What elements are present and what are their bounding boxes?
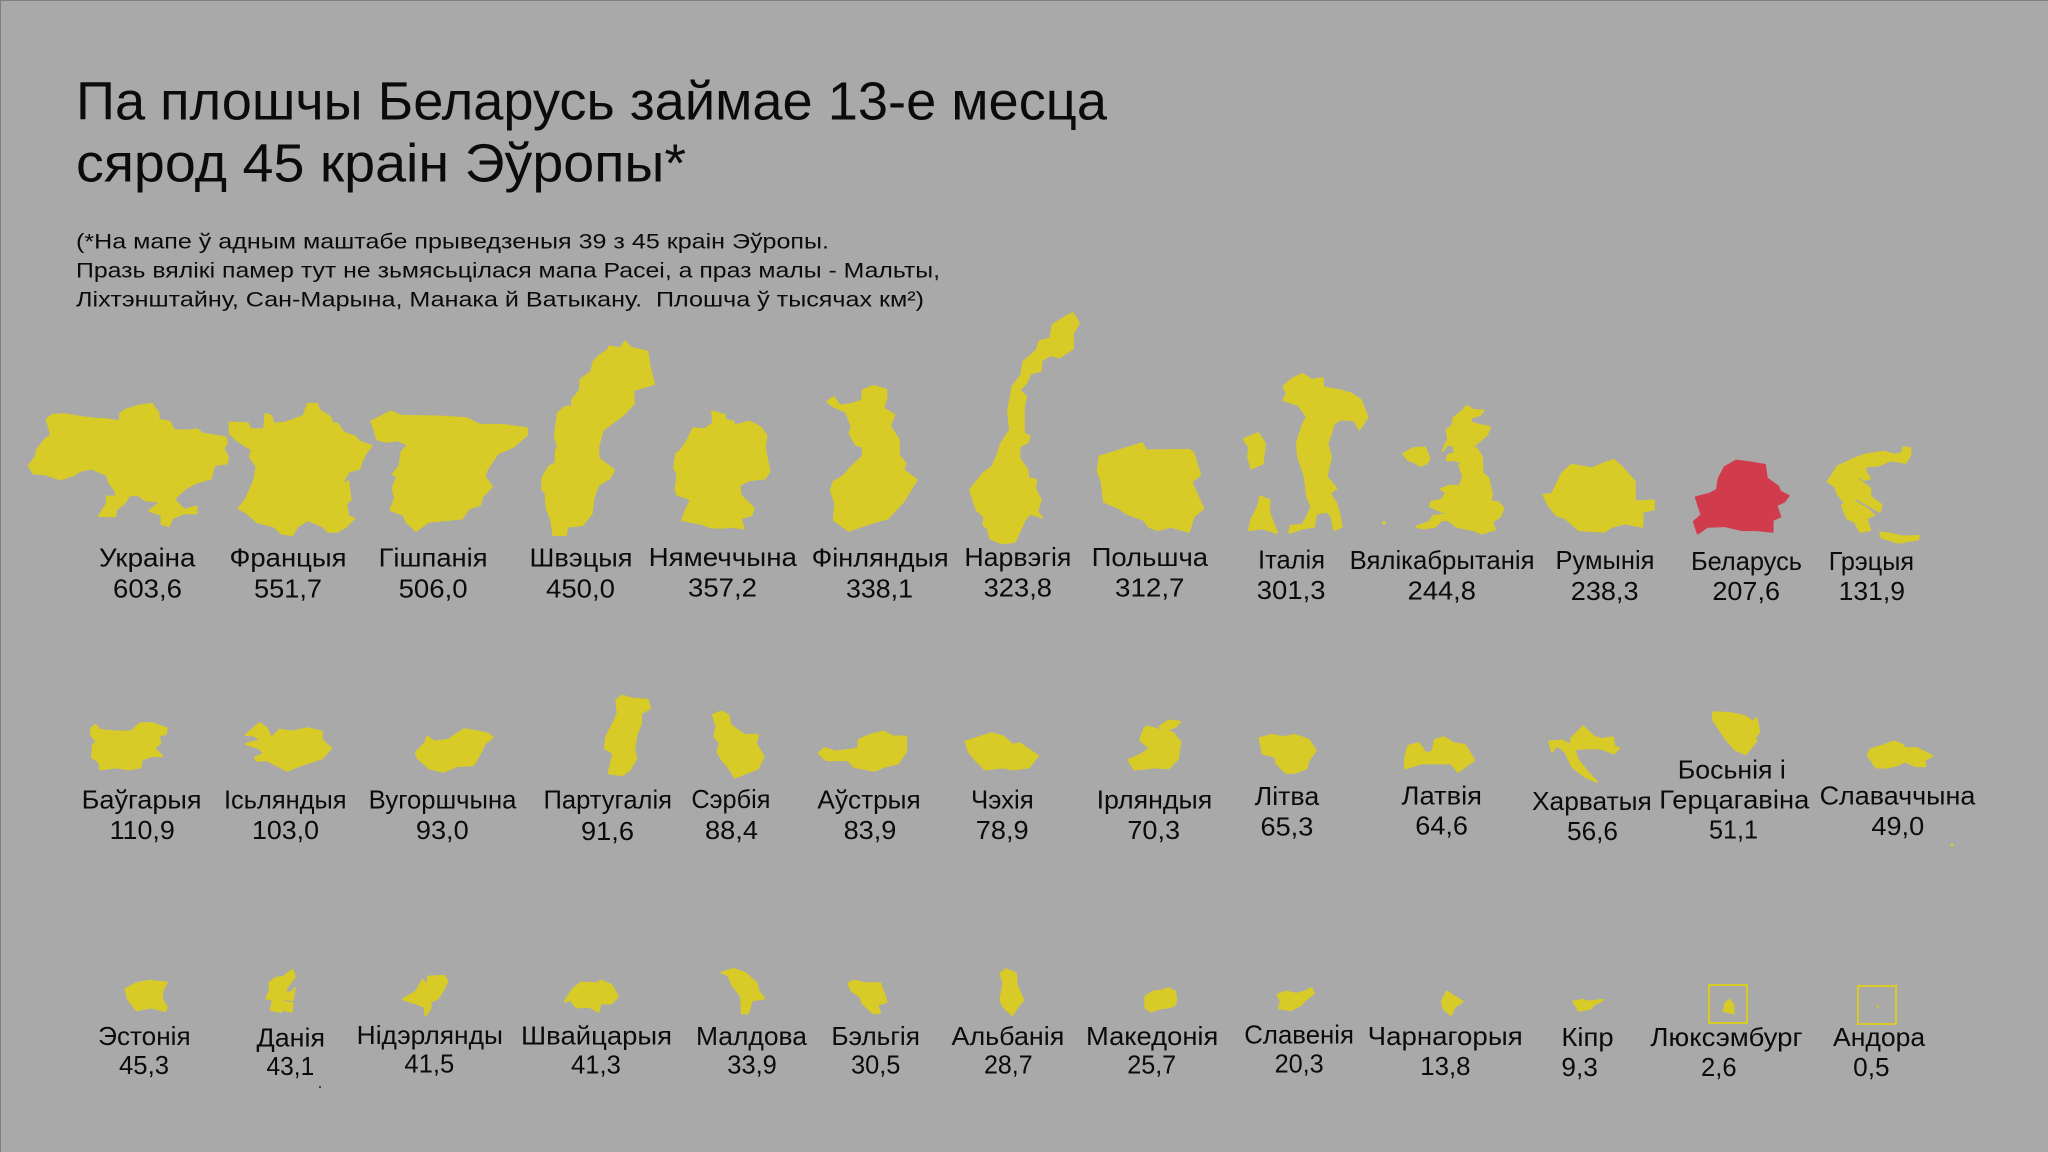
country: Эстонія bbox=[98, 981, 191, 1080]
icon: Andorra inset frame bbox=[1858, 986, 1896, 1024]
country: Славаччына: Славаччына bbox=[1820, 780, 1976, 810]
country: Ірляндыя: 70,3 bbox=[1127, 815, 1180, 845]
country: Грэцыя bbox=[1828, 447, 1919, 606]
country: Румынія: 238,3 bbox=[1571, 576, 1638, 606]
country: Славенія: 20,3 bbox=[1275, 1048, 1324, 1078]
icon: Luxembourg inset frame bbox=[1709, 985, 1747, 1023]
country: Чарнагорыя: 13,8 bbox=[1420, 1051, 1470, 1081]
country: Бэльгія: Бэльгія bbox=[831, 1021, 920, 1051]
country: Нідэрлянды: 41,5 bbox=[404, 1049, 454, 1079]
country: Харватыя: Харватыя bbox=[1532, 786, 1652, 816]
subtitle note: Празь вялікі памер тут не зьмясьцілася мапа Расеі, а праз малы - Мальты, bbox=[76, 259, 940, 283]
country: Сэрбія: Сэрбія bbox=[691, 784, 770, 814]
country: Чэхія: 78,9 bbox=[976, 815, 1029, 845]
country: Італія bbox=[1244, 374, 1367, 605]
country: Гішпанія bbox=[371, 412, 527, 604]
country: Малдова: Малдова bbox=[696, 1021, 808, 1051]
country: Італія: 301,3 bbox=[1257, 575, 1326, 605]
country: Харватыя bbox=[1532, 727, 1652, 846]
country: Вялікабрытанія: 244,8 bbox=[1408, 575, 1476, 605]
country: Кіпр: 9,3 bbox=[1561, 1052, 1598, 1082]
country: Бэльгія bbox=[831, 981, 920, 1079]
country: Славенія: Славенія bbox=[1244, 1019, 1354, 1049]
country: Нарвэгія: Нарвэгія bbox=[964, 542, 1071, 572]
country: Нямеччына: Нямеччына bbox=[649, 542, 798, 572]
country: Швэцыя: 450,0 bbox=[546, 574, 615, 604]
country: Літва bbox=[1255, 735, 1320, 842]
country: Босьнія і Герцагавіна bbox=[1659, 712, 1810, 844]
country: Люксэмбург: 2,6 bbox=[1701, 1052, 1737, 1082]
country: Францыя: Францыя bbox=[230, 543, 346, 573]
country: Ісьляндыя bbox=[224, 723, 346, 845]
country: Сэрбія bbox=[691, 712, 770, 845]
country: Харватыя: 56,6 bbox=[1567, 816, 1618, 846]
country: Ірляндыя bbox=[1097, 721, 1212, 845]
country: Аўстрыя bbox=[817, 732, 921, 845]
country: Фінляндыя: Фінляндыя bbox=[812, 543, 949, 573]
country: Вугоршчына bbox=[369, 729, 517, 845]
country: Ісьляндыя: 103,0 bbox=[252, 815, 319, 845]
country: Люксэмбург: Люксэмбург bbox=[1650, 1022, 1803, 1052]
country: Партугалія: 91,6 bbox=[581, 816, 634, 846]
country: Сэрбія: 88,4 bbox=[705, 815, 758, 845]
country: Кіпр: Кіпр bbox=[1561, 1022, 1614, 1052]
country: Румынія: Румынія bbox=[1556, 545, 1654, 575]
country: Аўстрыя: 83,9 bbox=[844, 815, 896, 845]
country: Малдова bbox=[696, 969, 808, 1079]
country: Літва: 65,3 bbox=[1260, 812, 1313, 842]
country: Францыя bbox=[229, 404, 371, 604]
country: Украіна bbox=[29, 404, 228, 604]
country: Баўгарыя: Баўгарыя bbox=[82, 784, 202, 814]
country: Ісьляндыя: Ісьляндыя bbox=[224, 784, 346, 814]
country: Эстонія: Эстонія bbox=[98, 1021, 191, 1051]
country: Партугалія bbox=[544, 696, 672, 846]
country: Францыя: 551,7 bbox=[254, 574, 322, 604]
country: Баўгарыя bbox=[82, 723, 202, 845]
country: Швайцарыя: Швайцарыя bbox=[521, 1020, 672, 1050]
country: Баўгарыя: 110,9 bbox=[110, 815, 175, 845]
country: Андора: Андора bbox=[1833, 1022, 1926, 1052]
country: Літва: Літва bbox=[1255, 781, 1320, 811]
country: Партугалія: Партугалія bbox=[544, 784, 672, 814]
country: Нарвэгія: 323,8 bbox=[984, 573, 1052, 603]
country: Чэхія: Чэхія bbox=[971, 784, 1034, 814]
country: Ірляндыя: Ірляндыя bbox=[1097, 784, 1212, 814]
country: Македонія: 25,7 bbox=[1127, 1049, 1176, 1079]
country: Фінляндыя: 338,1 bbox=[846, 574, 913, 604]
country: Альбанія: Альбанія bbox=[952, 1021, 1064, 1051]
country: Данія: 43,1 bbox=[266, 1051, 314, 1081]
country: Андора bbox=[1833, 986, 1926, 1082]
country: Нямеччына bbox=[649, 412, 798, 603]
country: Нідэрлянды: Нідэрлянды bbox=[357, 1020, 503, 1050]
country: Фінляндыя bbox=[812, 386, 949, 604]
country: Вугоршчына: 93,0 bbox=[416, 815, 469, 845]
country: Данія bbox=[256, 970, 325, 1081]
country: Нарвэгія bbox=[964, 313, 1079, 603]
country: Малдова: 33,9 bbox=[727, 1049, 777, 1079]
country: Люксэмбург bbox=[1650, 985, 1803, 1082]
country: Польшча: 312,7 bbox=[1115, 573, 1184, 603]
country: Альбанія: 28,7 bbox=[984, 1049, 1033, 1079]
country: Латвія bbox=[1402, 737, 1482, 840]
country: Македонія: Македонія bbox=[1086, 1021, 1218, 1051]
country: Босьнія і Герцагавіна: Босьнія і bbox=[1678, 755, 1786, 785]
country: Славаччына bbox=[1820, 742, 1976, 841]
subtitle note: (*На мапе ў адным маштабе прыведзеныя 39 з 45 краін Эўропы. bbox=[76, 229, 829, 253]
country: Андора: 0,5 bbox=[1853, 1052, 1890, 1082]
country: Румынія bbox=[1544, 460, 1654, 606]
country: Швайцарыя bbox=[521, 981, 672, 1079]
country: Эстонія: 45,3 bbox=[119, 1050, 169, 1080]
country: Вялікабрытанія: Вялікабрытанія bbox=[1350, 545, 1535, 575]
country: Македонія bbox=[1086, 988, 1218, 1079]
title: Па плошчы Беларусь займае 13-е месца bbox=[76, 71, 1108, 131]
country: Украіна: Украіна bbox=[99, 543, 196, 573]
country: Вугоршчына: Вугоршчына bbox=[369, 784, 517, 814]
country: Вялікабрытанія bbox=[1350, 406, 1535, 605]
country: Грэцыя: 131,9 bbox=[1839, 576, 1905, 606]
country: Польшча bbox=[1092, 443, 1209, 603]
country: Гішпанія: Гішпанія bbox=[379, 543, 488, 573]
title: сярод 45 краін Эўропы* bbox=[76, 134, 686, 194]
country: Грэцыя: Грэцыя bbox=[1829, 546, 1914, 576]
country: Нідэрлянды bbox=[357, 976, 503, 1079]
country: Нямеччына: 357,2 bbox=[688, 573, 757, 603]
title bbox=[76, 71, 1108, 194]
country: Беларусь: 207,6 bbox=[1712, 576, 1780, 606]
country: Латвія: 64,6 bbox=[1415, 810, 1468, 840]
country: Швэцыя: Швэцыя bbox=[530, 543, 632, 573]
country: Альбанія bbox=[952, 969, 1064, 1079]
country: Славаччына: 49,0 bbox=[1871, 811, 1924, 841]
country: Чэхія bbox=[966, 733, 1038, 845]
country: Аўстрыя: Аўстрыя bbox=[817, 784, 921, 814]
country: Босьнія і Герцагавіна: 51,1 bbox=[1709, 814, 1758, 844]
subtitle note bbox=[76, 229, 940, 312]
country: Славенія bbox=[1244, 988, 1354, 1078]
country: Чарнагорыя: Чарнагорыя bbox=[1368, 1021, 1523, 1051]
country: Беларусь bbox=[1691, 461, 1802, 606]
country: Італія: Італія bbox=[1258, 544, 1325, 574]
country: Швэцыя bbox=[530, 342, 654, 604]
country: Беларусь: Беларусь bbox=[1691, 546, 1802, 576]
subtitle note: Ліхтэнштайну, Сан-Марына, Манака й Ватыкану. Плошча ў тысячах км²) bbox=[76, 288, 924, 312]
country: Кіпр bbox=[1561, 1000, 1614, 1082]
country: Польшча: Польшча bbox=[1092, 542, 1209, 572]
country: Босьнія і Герцагавіна: Герцагавіна bbox=[1659, 784, 1810, 814]
country: Украіна: 603,6 bbox=[113, 574, 182, 604]
country: Данія: Данія bbox=[256, 1023, 325, 1053]
country: Гішпанія: 506,0 bbox=[399, 574, 468, 604]
country: Швайцарыя: 41,3 bbox=[571, 1049, 621, 1079]
country: Чарнагорыя bbox=[1368, 992, 1523, 1081]
country: Латвія: Латвія bbox=[1402, 780, 1482, 810]
country: Бэльгія: 30,5 bbox=[851, 1049, 900, 1079]
